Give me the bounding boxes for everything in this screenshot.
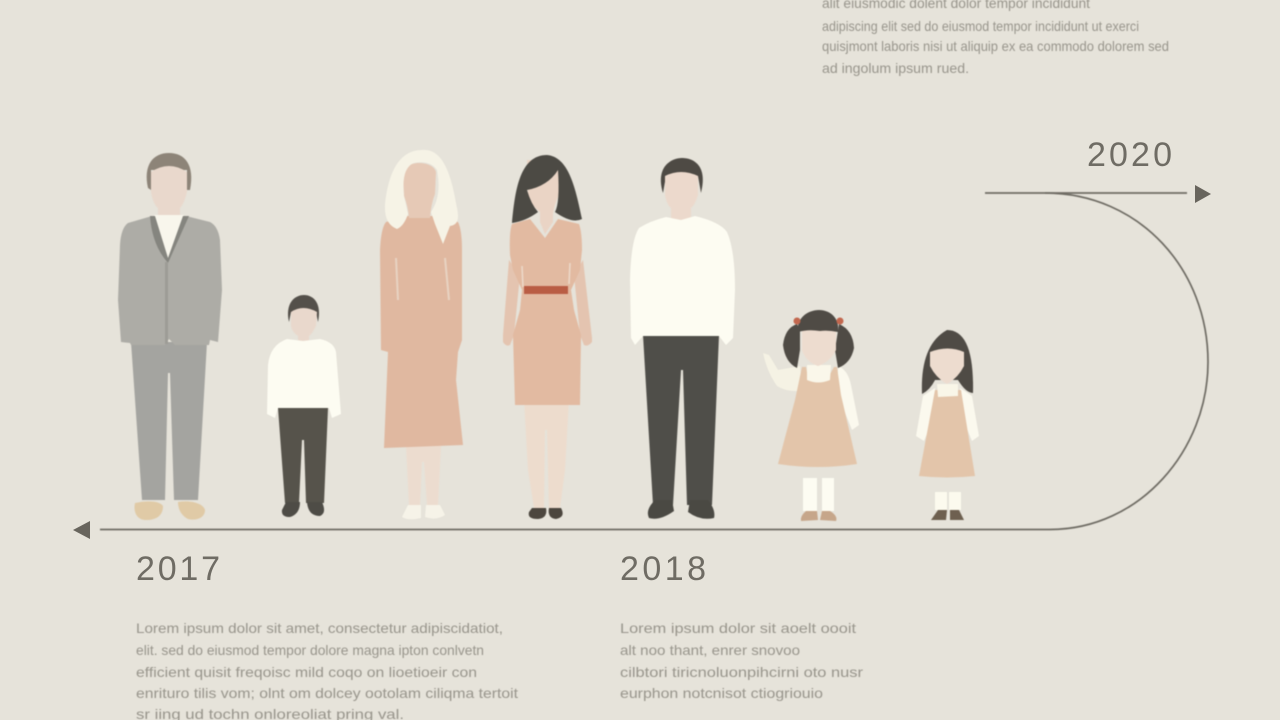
figure: father in white shirt and dark trousers [630, 158, 735, 519]
arrow: right end of timeline [1195, 185, 1211, 203]
text block: top right description: ad ingolum ipsum rued. [822, 60, 969, 76]
text block: top right description: adipiscing elit sed do eiusmod tempor incididunt ut exerci [822, 18, 1139, 34]
text block: 2017 description: elit. sed do eiusmod tempor dolore magna ipton conlvetn [136, 642, 484, 658]
text block: 2017 description: Lorem ipsum dolor sit amet, consectetur adipiscidatiot, [136, 620, 503, 636]
figure: girl with pigtails waving [763, 310, 859, 521]
text block: 2018 description: cilbtori tiricnoluonpihcirni oto nusr [620, 664, 863, 680]
figure: mother with red belt [503, 155, 592, 519]
figure: boy in white shirt [267, 295, 341, 517]
text block: 2017 description: enrituro tilis vom; olnt om dolcey ootolam ciliqma tertoit [136, 685, 518, 701]
text block: 2018 description: Lorem ipsum dolor sit aoelt oooit [620, 620, 856, 636]
figure: grandmother in peach dress [380, 150, 463, 519]
text block: top right description: quisjmont laboris nisi ut aliquip ex ea commodo dolorem sed [822, 38, 1169, 54]
text block: top right description [822, 0, 1169, 76]
arrow: left end of timeline [73, 521, 90, 539]
text block: 2018 description: eurphon notcnisot ctiogriouio [620, 685, 823, 701]
figure: small girl with long hair [916, 330, 979, 520]
year label: 2020: 2020 [1087, 136, 1172, 174]
year label: 2017: 2017 [136, 550, 220, 588]
belt [524, 286, 568, 294]
timeline: curved axis [100, 193, 1208, 530]
hair bows [794, 318, 844, 324]
text block: 2018 description [620, 620, 863, 701]
text block: 2018 description: alt noo thant, enrer snovoo [620, 642, 800, 658]
text block: 2017 description [136, 620, 518, 720]
year label: 2018: 2018 [620, 550, 706, 588]
text block: 2017 description: efficient quisit freqoisc mild coqo on lioetioeir con [136, 664, 477, 680]
figure: grandfather in grey suit [118, 153, 222, 520]
